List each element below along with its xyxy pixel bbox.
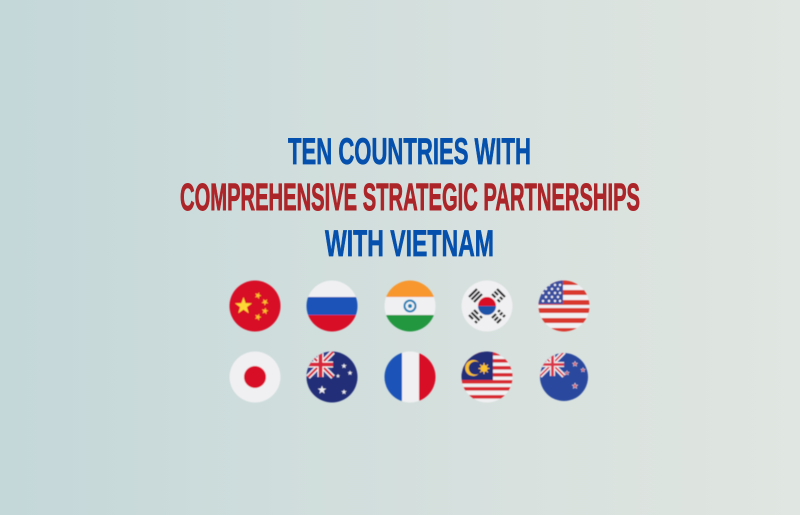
flag: France bbox=[384, 351, 436, 403]
flag: China bbox=[229, 280, 281, 332]
flag: Russia bbox=[306, 280, 358, 332]
title line 3: WITH VIETNAM bbox=[325, 223, 494, 264]
flag: Australia bbox=[306, 351, 358, 403]
flag: United States bbox=[538, 280, 590, 333]
title line 1: TEN COUNTRIES WITH bbox=[288, 131, 531, 172]
flag: Malaysia bbox=[461, 351, 513, 403]
flag: Japan bbox=[230, 352, 280, 402]
flag: New Zealand bbox=[538, 351, 590, 403]
title bbox=[180, 131, 640, 264]
flag: South Korea bbox=[462, 280, 512, 332]
flag: India bbox=[384, 280, 436, 332]
